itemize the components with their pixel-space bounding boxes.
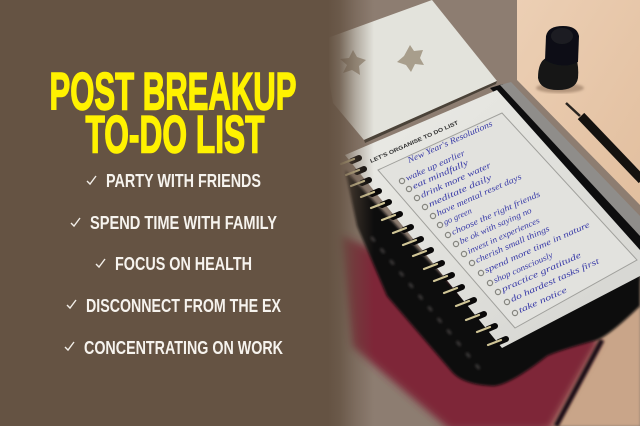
spiral binding (341, 158, 506, 372)
item: focus on health: FOCUS ON HEALTH (115, 253, 252, 274)
handwritten list: be ok with saying no (458, 205, 533, 246)
handwritten list: practice gratitude (498, 250, 583, 294)
handwritten list: have mental reset days (435, 171, 524, 218)
handwritten list: do hardest tasks first (509, 255, 601, 304)
checklist circles (399, 178, 518, 316)
page heading: LET'S ORGANISE TO DO LIST (369, 120, 460, 165)
handwritten list: drink more water (419, 159, 493, 200)
item: concentrating on work: CONCENTRATING ON WORK (84, 337, 283, 358)
desk surface (300, 0, 640, 426)
red notebook cover (340, 235, 600, 426)
handwritten heading: New Year's Resolutions (405, 118, 495, 165)
item: spend time with family: SPEND TIME WITH FAMILY (90, 212, 278, 233)
handwritten list: choose the right friends (450, 188, 542, 237)
notebook page (345, 90, 640, 348)
handwritten list: cherish small things (474, 223, 552, 265)
dark cover edge (556, 340, 602, 426)
handwritten list: spend more time in nature (483, 219, 591, 275)
lower right desk (540, 280, 640, 426)
handwritten list: invest in experiences (466, 215, 542, 256)
binding strip (490, 82, 640, 252)
handwritten list: eat mindfully (411, 157, 470, 191)
title: POST BREAKUP (50, 62, 296, 122)
left fade panel (328, 0, 374, 426)
envelope (322, 0, 497, 143)
item: party with friends: PARTY WITH FRIENDS (106, 170, 261, 191)
ink bottle (536, 26, 584, 93)
black shadow and underside (345, 170, 640, 386)
solid brown background (0, 0, 329, 426)
ruled box (378, 113, 637, 328)
icon: star right (397, 45, 424, 72)
title (50, 62, 296, 164)
handwritten list: meditate daily (427, 172, 493, 209)
icon: star left (340, 50, 366, 75)
handwritten list: shop consciously (492, 250, 555, 285)
photo: notebook on desk (300, 0, 640, 426)
item: disconnect from the ex: DISCONNECT FROM THE EX (86, 295, 282, 316)
checklist (65, 170, 283, 358)
handwritten list (404, 147, 601, 315)
handwritten list: take notice (517, 284, 569, 315)
handwritten list: go green (442, 205, 473, 227)
peach paper (517, 0, 640, 205)
title: TO-DO LIST (86, 106, 264, 164)
handwritten list: wake up earlier (404, 147, 467, 183)
pen (566, 103, 640, 180)
